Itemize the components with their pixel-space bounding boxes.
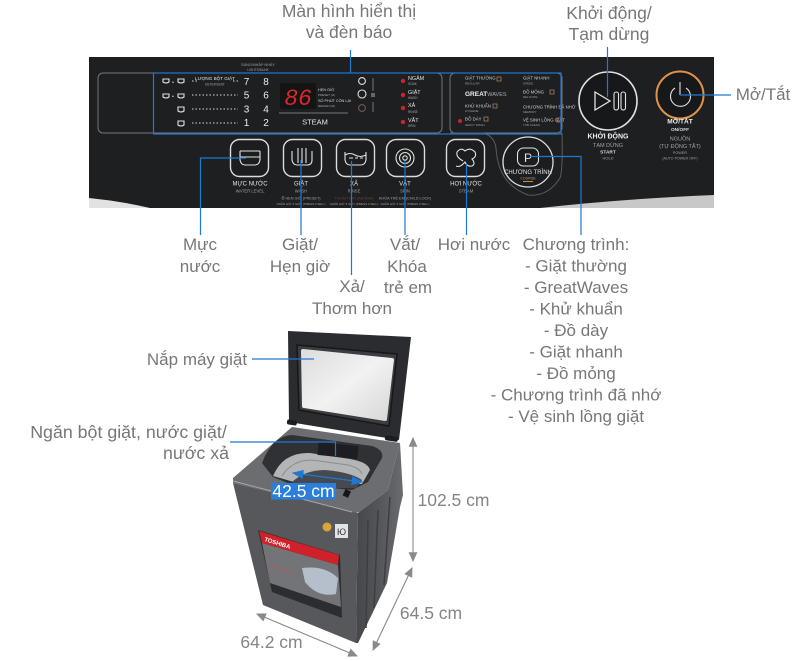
button: power: NGUỒN [670,136,690,142]
control panel: LIGHTS/BLINK [247,68,270,72]
status indicators [401,75,425,128]
button: start: KHỞI ĐỘNG [588,132,629,140]
dimension: tub diameter [271,473,362,501]
callout: spin [384,161,432,297]
control panel: SÁNG/NHẤP NHÁY [241,63,275,67]
callout: lid: Nắp máy giặt [147,350,247,369]
callout: rinse: Xả/ [339,277,365,296]
callout: steam [438,164,511,254]
water level indicators: 4 [263,104,269,116]
callout: rinse [312,161,392,318]
water level indicators: LƯỢNG BỘT GIẶT [195,75,235,81]
water level indicators: 3 [244,104,250,116]
dimension: height [413,438,489,561]
program list [458,76,576,127]
program list: VỆ SINH LỒNG GIẶT [523,118,565,122]
button: course: P [524,151,532,165]
button: wash: WASH [295,188,307,194]
button: power: (TỰ ĐỘNG TẮT) [659,142,701,150]
button: spin: KHÓA TRẺ EM (CHILD LOCK) [379,196,432,200]
callout: water level [180,158,246,276]
energy labels [322,522,348,538]
status indicators: SOAK [408,82,418,86]
program list: TUB CLEAN [523,123,540,127]
button: spin: VẮT [399,180,411,188]
digital display and steam label: REMAIN (M) [318,104,335,108]
control panel [89,57,714,208]
callout: start [566,3,652,97]
callout frame: display area [154,50,561,134]
callout: power: Mở/Tắt [736,85,791,104]
status indicators: RINSE [408,110,418,114]
callout: spin: Khóa [387,257,427,276]
dimension: tub diameter: 42.5 cm [272,481,335,501]
water level indicators: 5 [244,90,250,102]
button: steam: STEAM [459,188,474,194]
button: power: MỞ/TẮT [667,116,693,126]
callout: rinse: Thơm hơn [312,299,392,318]
button: rinse: XẢ [350,180,358,188]
dimension: width: 64.2 cm [240,632,303,652]
callout: water level: Mực [183,235,217,254]
button: spin: SPIN [400,188,410,194]
callout: course programs: - Đồ dày [544,321,609,340]
button: start: START [600,150,616,156]
button: rinse [330,140,378,206]
dimension: depth [373,568,462,650]
water level indicators: 7 [244,77,250,88]
callout: power [680,85,791,104]
water level indicators: 8 [263,77,269,88]
water level indicators: DETERGENT [205,82,225,86]
washing machine [233,331,411,643]
callout: course programs: - Giặt thường [525,256,627,276]
callout: start: Tạm dừng [569,24,649,44]
machine sticker: TOSHIBA [263,537,292,551]
program list: DELICATE [523,95,537,99]
button: spin [379,140,432,206]
button: course: CHƯƠNG TRÌNH [504,169,552,176]
button: start: HOLD [602,156,614,160]
button: steam: HƠI NƯỚC [450,180,483,188]
program list: MEMORY [523,110,536,114]
callout: steam: Hơi nước [438,235,511,254]
button: rinse: THƠM HƠN (AROMA) [335,196,374,200]
button: power: (AUTO POWER OFF) [662,156,698,160]
dimension: width [240,614,357,656]
digital display and steam label: PRESET (H) [318,93,335,97]
water level indicators: 6 [263,90,269,102]
status indicators: VẮT [408,116,419,124]
button: start [579,72,637,160]
heading: display and indicators: Màn hình hiển thị [282,1,416,21]
button: rinse: NHẤN GIỮ 3 GIÂY (PRESS 3 SEC.) [330,201,378,206]
heading: display and indicators: và đèn báo [306,22,392,42]
water level indicators: • [172,80,174,86]
callout: wash: Giặt/ [282,235,318,254]
callout: course programs [491,156,661,426]
water level indicators: • [172,94,174,100]
button: power [656,72,704,160]
button: rinse: RINSE [348,188,361,194]
status indicators: SPIN [408,124,416,128]
machine sticker [258,530,342,618]
button: wash [277,140,325,206]
button: wash: GIẶT [294,180,308,188]
machine body [233,427,403,643]
water level indicators: 2 [263,118,269,129]
button: wash: ⏱ HẸN GIỜ (PRESET) [281,196,321,200]
machine lid [287,331,411,442]
callout: course programs: - Khử khuẩn [529,300,623,318]
callout: course programs: - Chương trình đã nhớ [491,386,661,404]
program list: GIẶT THƯỜNG [465,76,496,80]
callout: spin: Vắt/ [390,235,420,254]
callout: wash [270,160,330,276]
status indicators: XẢ [408,102,416,109]
callout: course programs: - Giặt nhanh [529,342,623,362]
water level indicators: 1 [244,118,250,129]
status indicators: NGÂM [408,75,425,82]
machine sticker: CHĂM SÓC [270,563,292,574]
program list: REGULAR [465,82,480,86]
callout: detergent drawer: Ngăn bột giặt, nước giặt/ [30,422,227,442]
callout: course programs: - Vệ sinh lồng giặt [508,407,644,426]
button: course: COURSE [520,176,536,180]
callout: water level: nước [180,257,221,276]
program list: HYGIENE [465,109,479,113]
button: power: ON/OFF [671,127,689,133]
callout: course programs: - GreatWaves [524,278,628,297]
callout: start: Khởi động/ [566,3,652,23]
callout: spin: trẻ em [384,278,432,297]
program list: GIẶT NHANH [523,76,549,80]
energy labels: Ю [337,527,346,537]
program list: KHỬ KHUẨN [465,104,491,108]
button: steam [446,140,484,194]
button: spin: NHẤN GIỮ 3 GIÂY (PRESS 3 SEC.) [381,201,429,206]
status indicators: WASH [408,96,418,100]
button: course [503,137,553,187]
dimension: depth: 64.5 cm [400,603,462,623]
digital display and steam label: 86 [284,86,312,112]
program list: SPEED [523,82,534,86]
button: wash: NHẤN GIỮ 3 GIÂY (PRESS 3 SEC.) [277,201,325,206]
digital display and steam label: SỐ PHÚT CÒN LẠI [318,98,351,103]
digital display and steam label [279,78,375,126]
dimension: height: 102.5 cm [418,490,489,510]
button: start: TẠM DỪNG [593,142,623,149]
program list: GREATWAVES [465,91,507,98]
callout: course programs: - Đồ mỏng [536,364,616,383]
program list: CHƯƠNG TRÌNH ĐÃ NHỚ [523,104,576,110]
callout: wash: Hẹn giờ [270,257,330,276]
program list: HEAVY WASH [465,123,485,127]
status indicators: GIẶT [408,89,421,96]
button: water level: WATER LEVEL [236,188,265,194]
digital display and steam label: STEAM [302,118,328,126]
digital display and steam label: HẸN GIỜ [318,87,335,92]
callout: detergent drawer [30,422,336,463]
machine tub [262,435,382,498]
callout: detergent drawer: nước xả [163,443,229,463]
water level indicators [163,75,269,129]
button: water level: MỰC NƯỚC [232,180,268,188]
program list: ĐỒ MỎNG [523,90,545,94]
button: power: POWER [673,151,687,155]
program list: ĐỒ DÀY [465,116,482,122]
callout: course programs: Chương trình: [523,235,629,254]
button: water level [230,140,268,194]
